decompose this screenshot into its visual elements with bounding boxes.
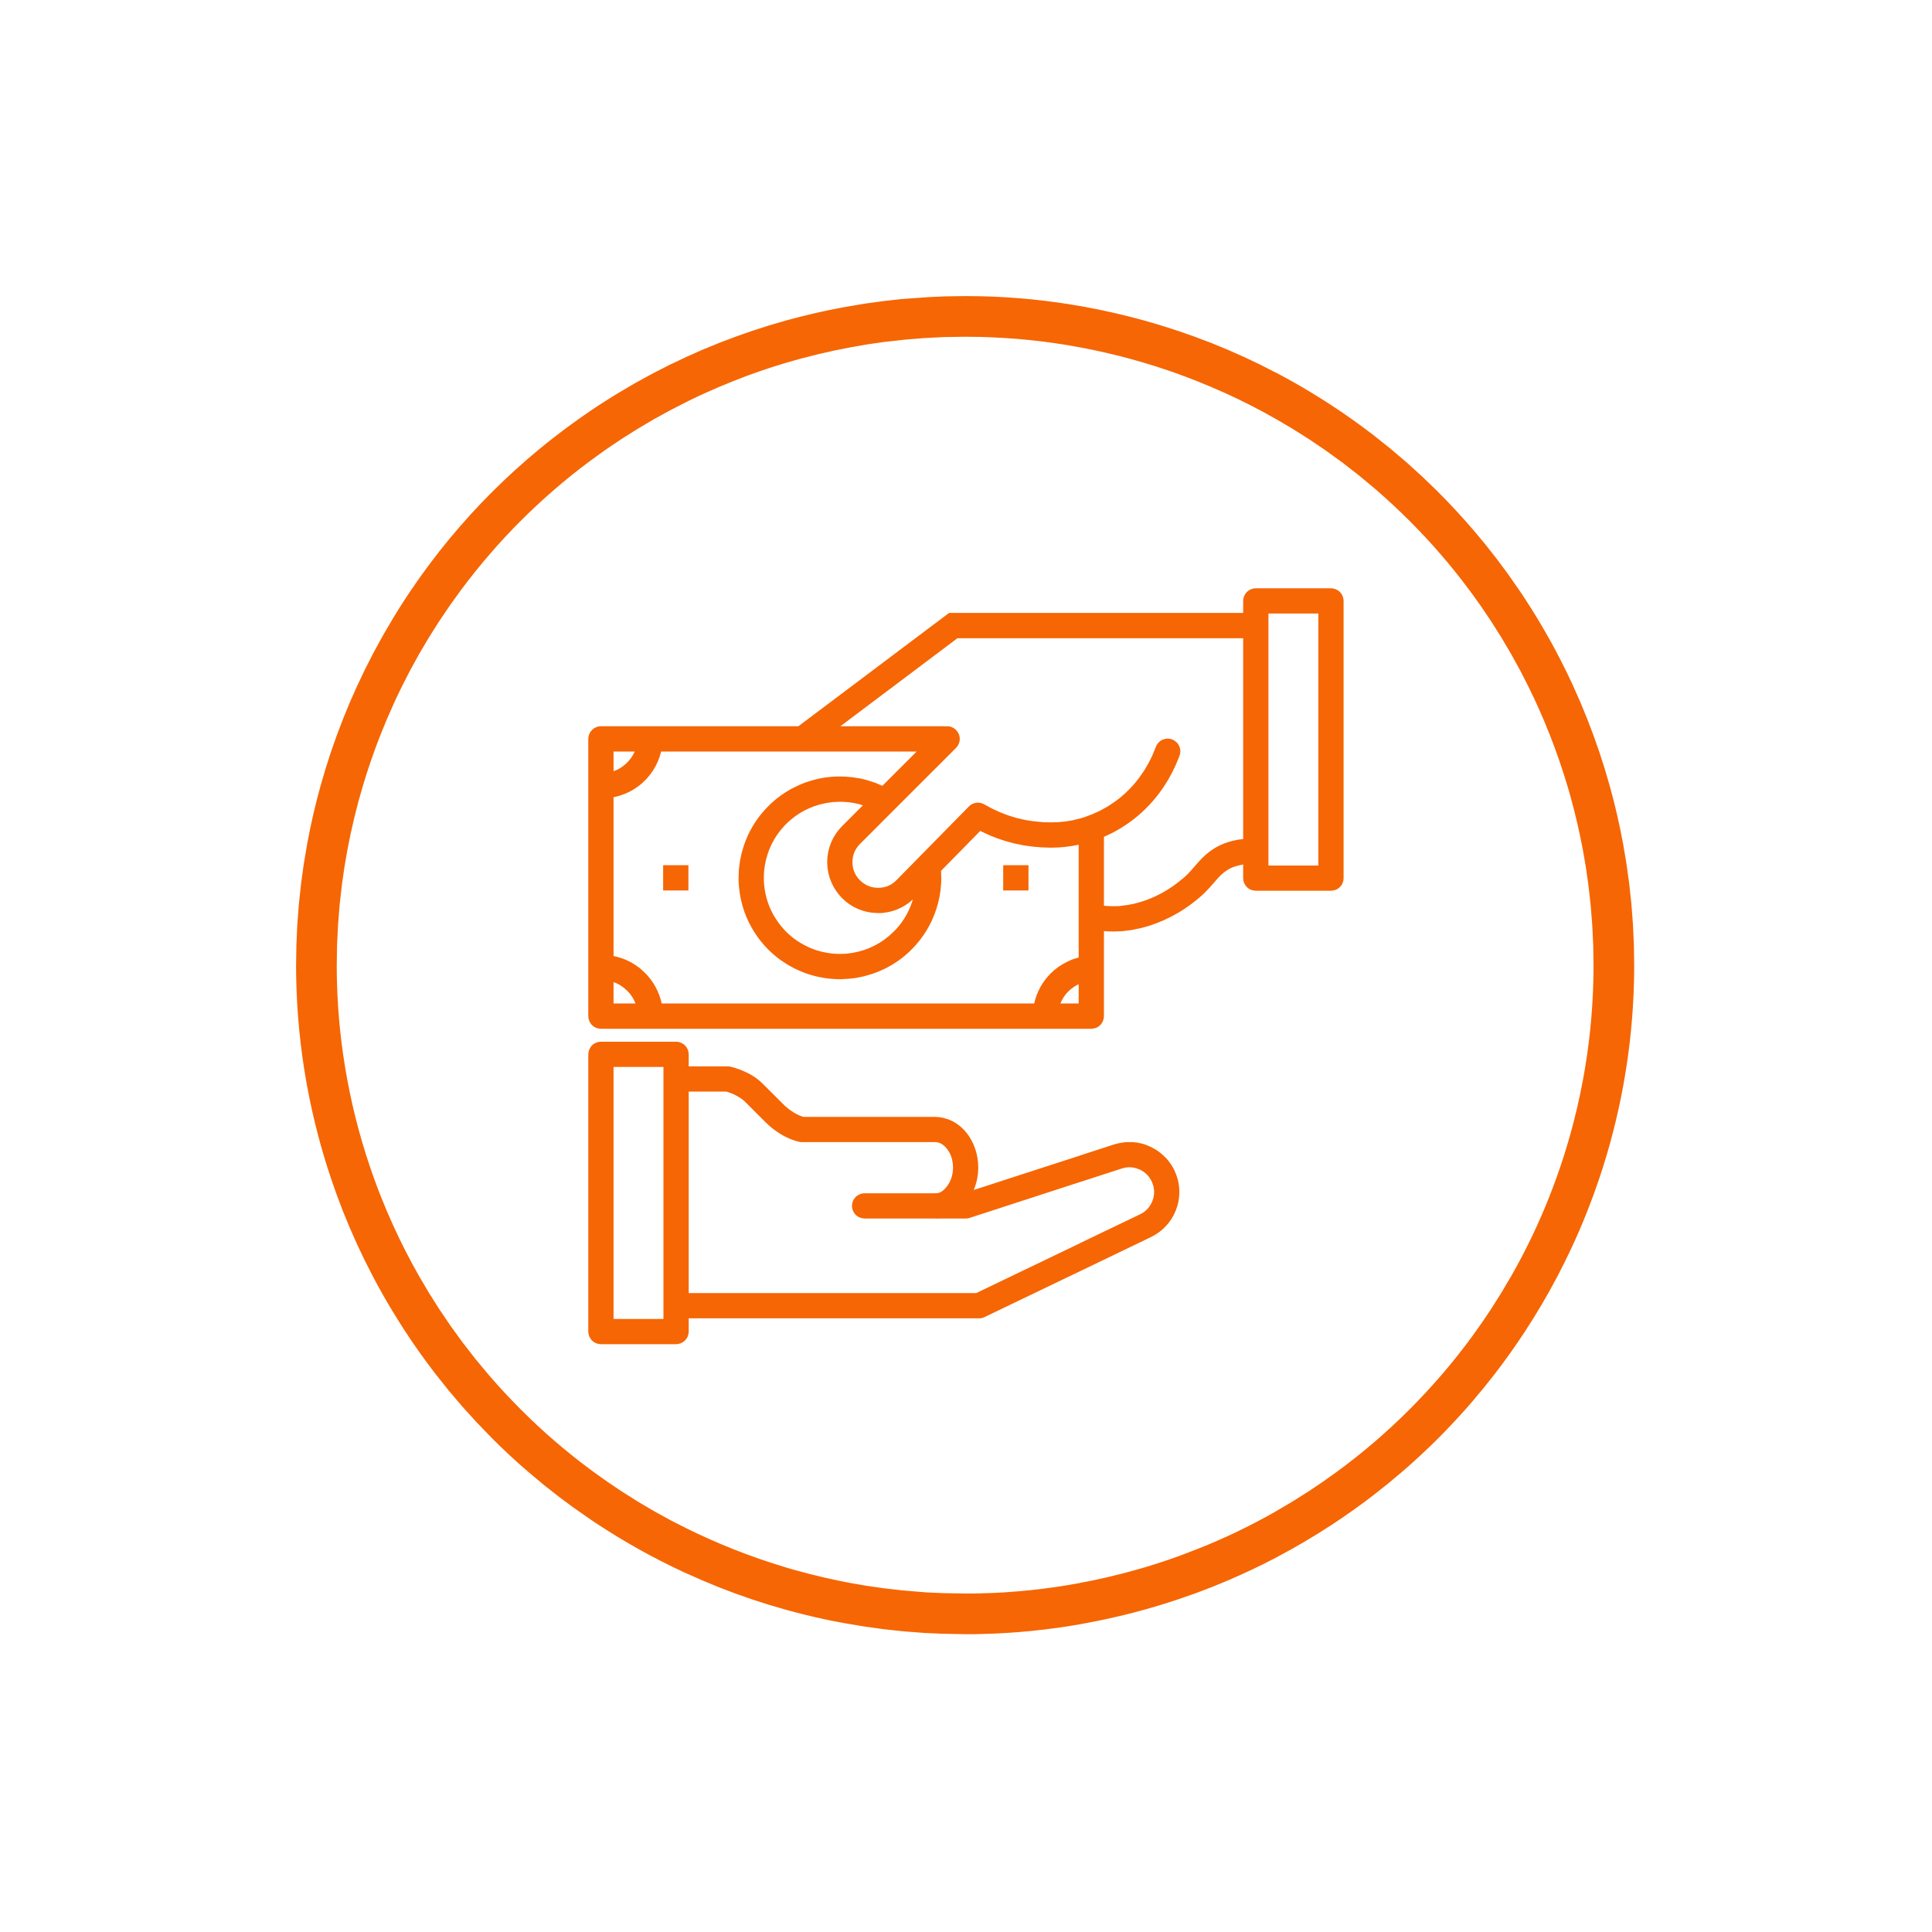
- banknote outline: [601, 739, 1091, 1016]
- back of giving hand: [801, 625, 1257, 740]
- giving hand fingertip and thumb: [840, 739, 1168, 900]
- banknote centre coin circle: [751, 789, 929, 967]
- icon: payment between hands in a ring: [316, 316, 1614, 1614]
- icon: banknote: [601, 739, 1091, 1016]
- banknote corner arcs: [604, 745, 1087, 1012]
- receiving hand palm: [676, 1155, 1167, 1306]
- receiving hand cuff: [601, 1054, 676, 1332]
- banknote left dot: [663, 866, 689, 890]
- outer circle ring: [316, 316, 1614, 1614]
- giving hand cuff: [1256, 601, 1331, 878]
- giving hand wrist curve: [1091, 851, 1255, 919]
- icon: receiving hand from lower left: [601, 1054, 1167, 1332]
- icon: giving hand from upper right: [801, 601, 1331, 919]
- banknote right dot: [1003, 866, 1029, 890]
- receiving hand thumb: [676, 1079, 966, 1206]
